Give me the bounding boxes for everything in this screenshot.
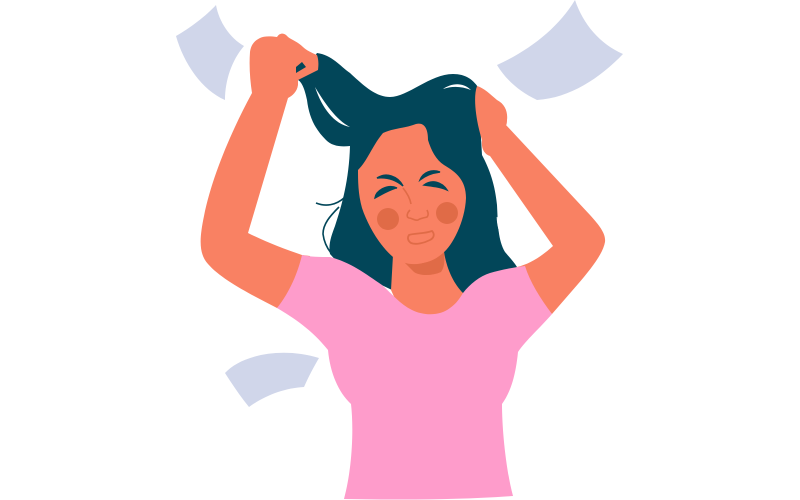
hair highlight right — [443, 84, 471, 90]
icon: paper top right — [497, 0, 623, 100]
icon: paper bottom left — [225, 353, 319, 407]
left eye — [375, 175, 403, 198]
neck — [391, 252, 466, 320]
hair between fingers — [296, 62, 306, 73]
neck shadow — [404, 252, 444, 275]
left arm and hand — [201, 34, 318, 308]
left cheek — [377, 208, 399, 230]
nose — [403, 188, 428, 220]
icon: paper top left — [176, 5, 244, 100]
mouth — [408, 231, 434, 244]
right arm and hand — [475, 86, 605, 314]
face — [358, 124, 466, 264]
hair highlight lower right — [497, 217, 503, 243]
hair — [298, 53, 517, 300]
right eye — [420, 171, 447, 190]
hair highlight left — [315, 87, 350, 127]
right cheek — [436, 202, 458, 224]
loose hair strand — [316, 198, 344, 253]
shirt — [277, 255, 552, 500]
